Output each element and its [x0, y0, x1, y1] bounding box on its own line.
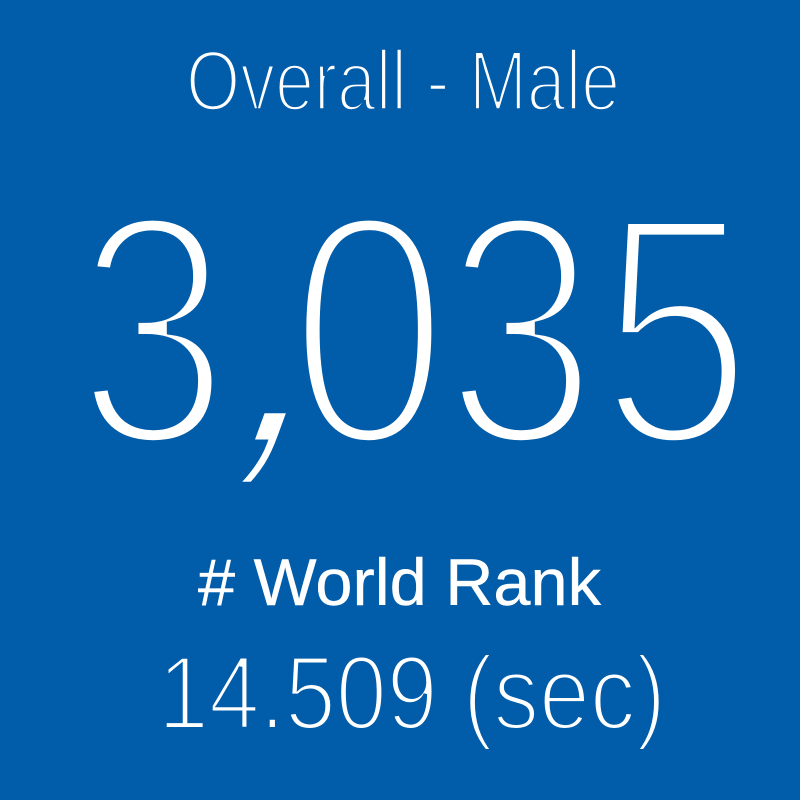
time value: 14.509 (sec) — [158, 635, 666, 752]
big number: , — [194, 146, 416, 514]
big number: 3 — [77, 146, 229, 515]
big number: 5 — [600, 146, 752, 515]
title: Overall - Male — [186, 34, 620, 129]
metric label: # World Rank — [198, 545, 602, 619]
big number: 0 — [289, 145, 449, 514]
big number — [77, 145, 752, 515]
big number: 3 — [445, 146, 597, 515]
